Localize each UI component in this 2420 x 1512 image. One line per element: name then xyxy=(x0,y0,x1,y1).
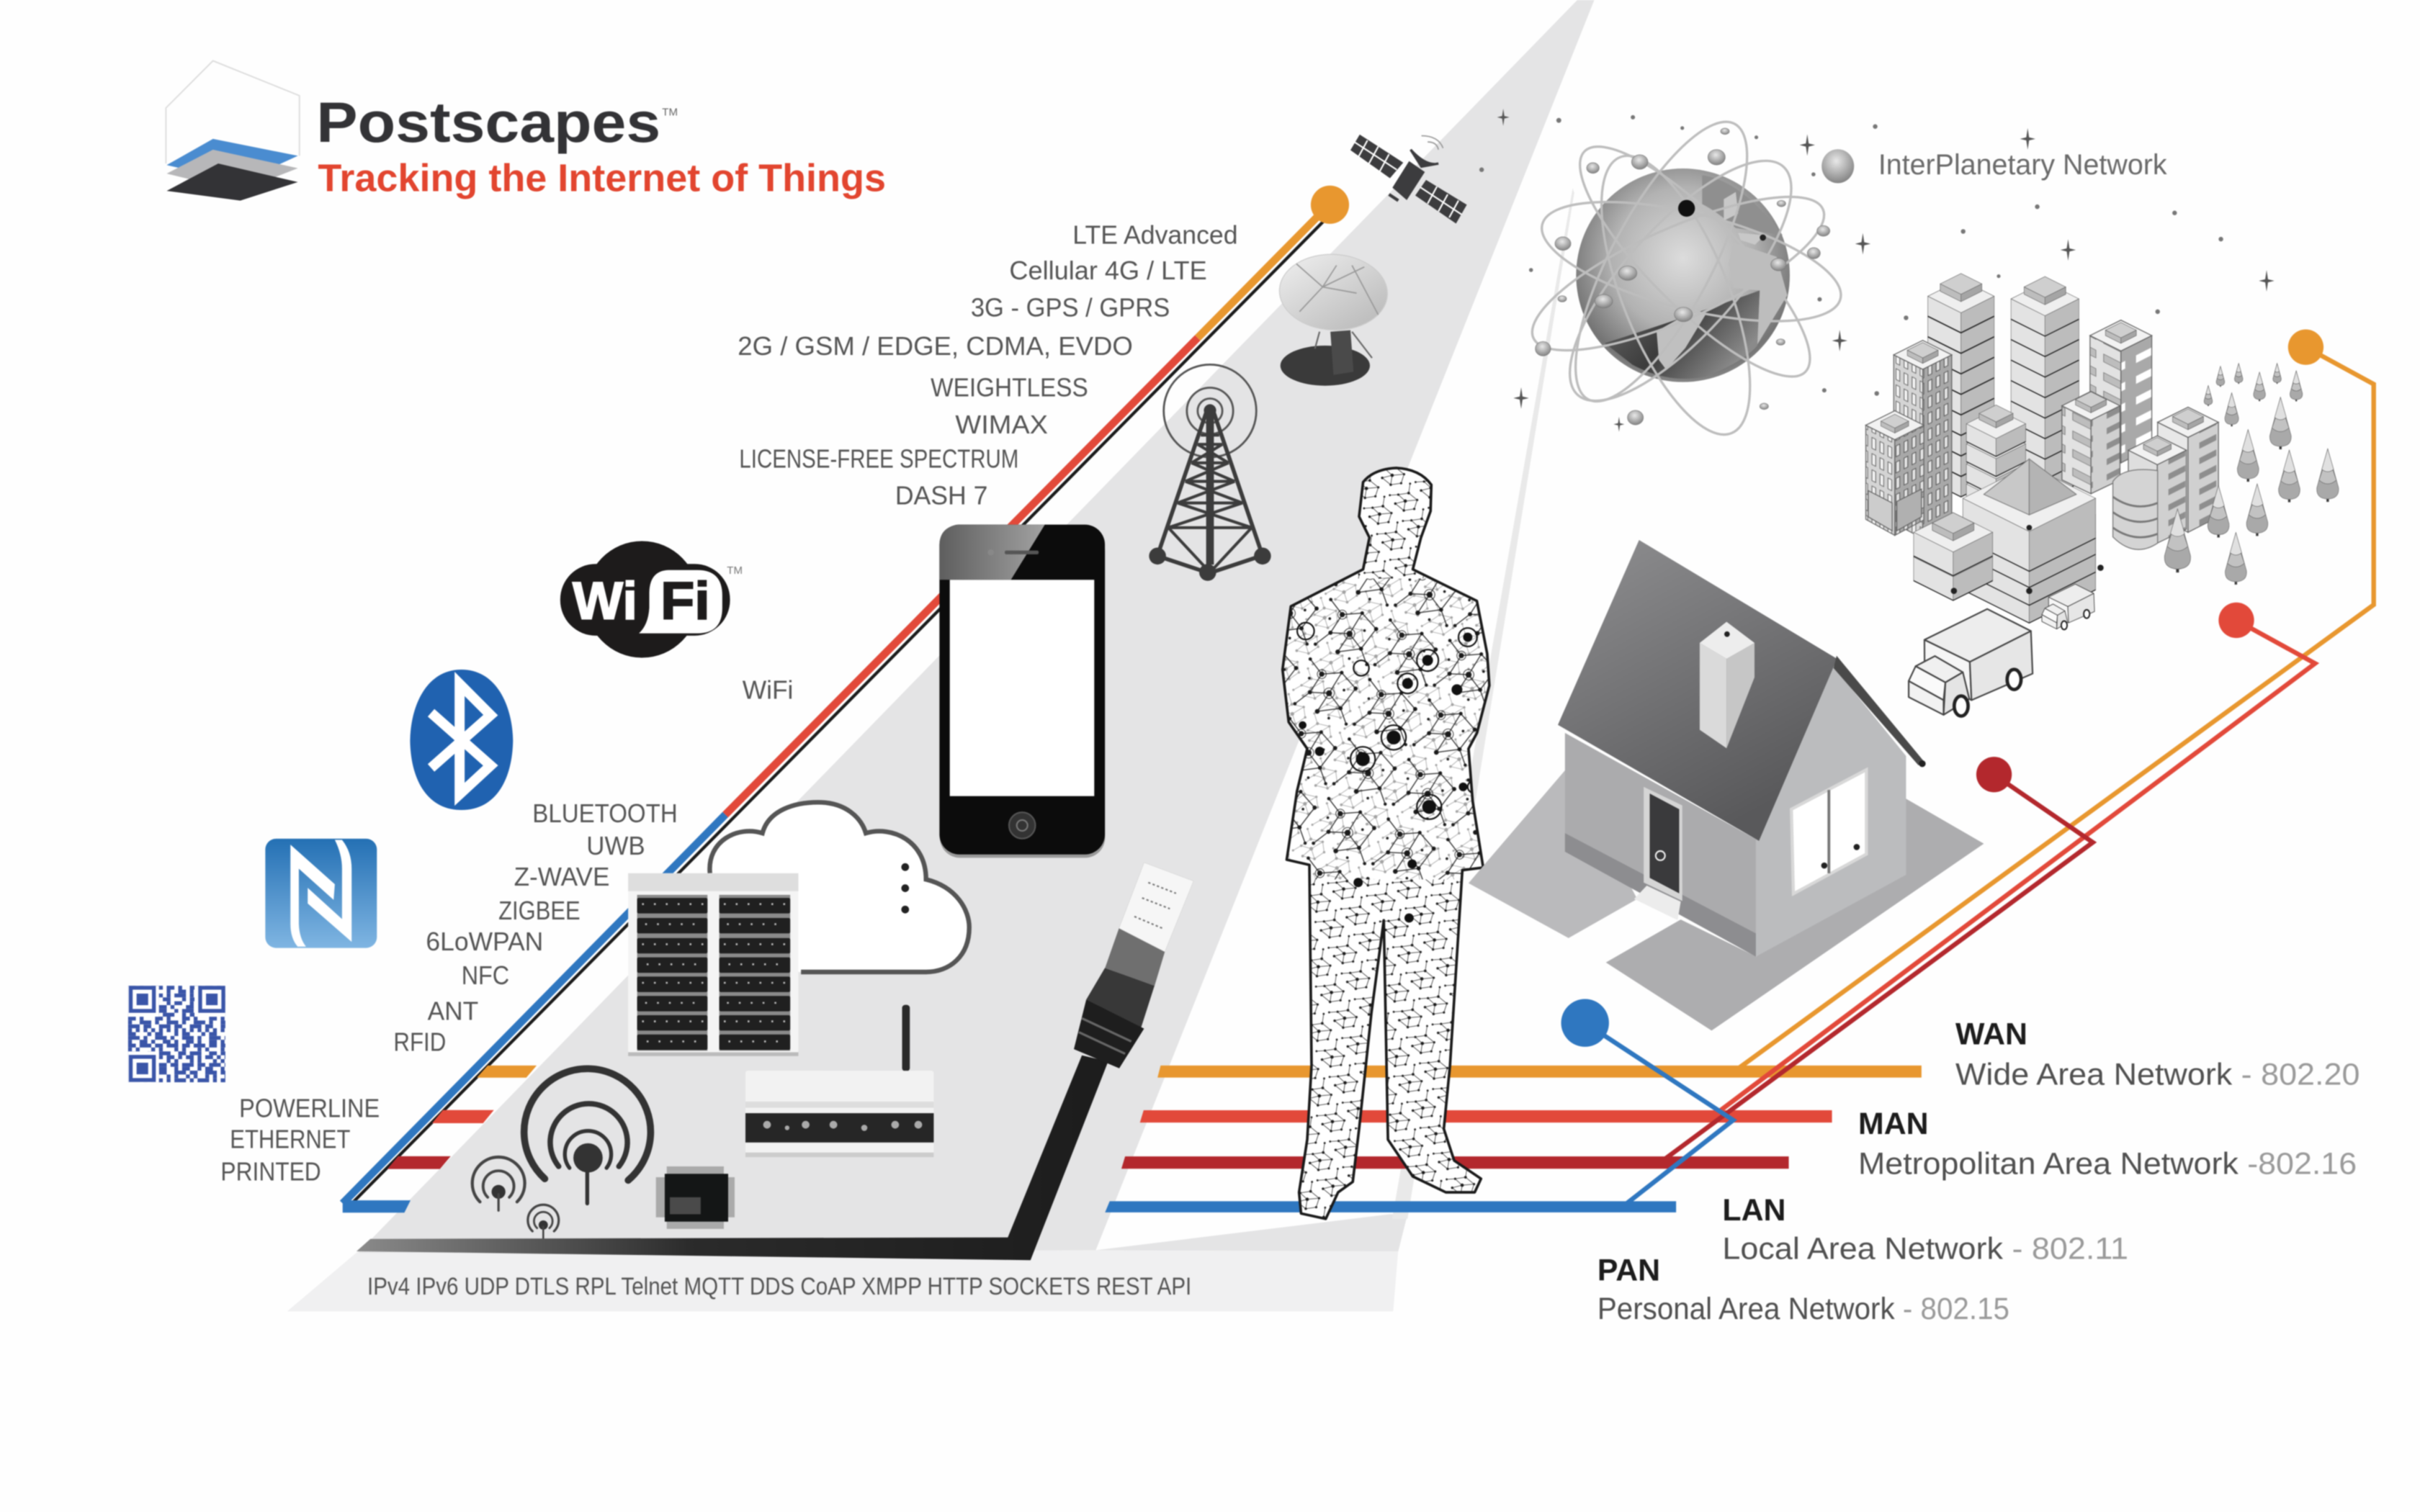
WAN label xyxy=(1955,1017,2360,1092)
icon: wifi logo: Wi xyxy=(573,572,637,630)
panel: diagonal technology rail xyxy=(343,186,1349,1208)
PAN label xyxy=(1597,1254,2009,1326)
pyramid building xyxy=(1963,459,2104,623)
icon: wifi logo xyxy=(560,541,743,658)
short range labels: Z-WAVE xyxy=(514,862,609,891)
wired labels xyxy=(220,1093,380,1186)
short range labels: BLUETOOTH xyxy=(532,798,678,828)
icon: small signal xyxy=(472,1157,525,1210)
stars xyxy=(1479,109,2275,432)
logo wordmark: Postscapes xyxy=(316,90,660,154)
MAN label: Metropolitan Area Network -802.16 xyxy=(1858,1147,2357,1182)
icon: small truck xyxy=(2042,584,2094,629)
panel: left rail stubs xyxy=(343,1066,537,1212)
building J xyxy=(2158,408,2218,532)
wired labels: PRINTED xyxy=(220,1156,321,1186)
interplanetary label: InterPlanetary Network xyxy=(1878,149,2167,181)
icon: cell tower xyxy=(1149,364,1271,581)
cellular labels: 3G - GPS / GPRS xyxy=(971,292,1170,322)
cellular labels: DASH 7 xyxy=(895,481,987,510)
icon: nfc xyxy=(265,839,377,948)
cellular labels: Cellular 4G / LTE xyxy=(1009,256,1207,285)
LAN label xyxy=(1722,1193,2128,1266)
icon: server rack xyxy=(628,873,798,1056)
tower A xyxy=(1928,274,1994,497)
panel: grey wedge under the man xyxy=(1095,1214,1407,1251)
PAN label: PAN xyxy=(1597,1254,1660,1288)
short range labels xyxy=(393,798,678,1056)
tower B xyxy=(2011,276,2079,500)
cellular labels: LTE Advanced xyxy=(1072,220,1238,250)
panel: dark red connector xyxy=(1665,757,2093,1158)
icon: qr code xyxy=(128,986,225,1082)
icon: microchip xyxy=(656,1166,735,1229)
MAN label xyxy=(1858,1107,2357,1182)
icon: tiny signal xyxy=(528,1205,559,1239)
short range labels: ANT xyxy=(428,996,478,1025)
panel: right network rails xyxy=(1105,1066,1922,1212)
cable: ethernet run xyxy=(357,1056,1108,1260)
WAN label: WAN xyxy=(1955,1017,2027,1052)
icon: router xyxy=(745,1005,933,1157)
cellular labels: 2G / GSM / EDGE, CDMA, EVDO xyxy=(738,331,1133,361)
icon: large truck xyxy=(1909,609,2033,716)
icon: cloud xyxy=(709,802,969,972)
panel: grey perspective beam xyxy=(358,0,1595,1253)
tagline: Tracking the Internet of Things xyxy=(318,158,886,200)
panel: red MAN connector xyxy=(1711,603,2315,1117)
wifi label: WiFi xyxy=(743,675,793,705)
building C xyxy=(1894,341,1952,539)
logo icon xyxy=(166,60,300,201)
LAN label: Local Area Network - 802.11 xyxy=(1722,1232,2128,1266)
panel: thin light beam xyxy=(1392,188,1574,1219)
city buildings xyxy=(1865,274,2339,623)
low building xyxy=(1914,513,1993,600)
cellular labels: LICENSE-FREE SPECTRUM xyxy=(739,444,1018,473)
man: networked human figure xyxy=(1273,463,1497,1227)
short range labels: RFID xyxy=(393,1027,446,1056)
planet xyxy=(1821,149,1854,183)
protocols label: IPv4 IPv6 UDP DTLS RPL Telnet MQTT DDS CoAP XMPP HTTP SOCKETS REST API xyxy=(367,1273,1191,1300)
icon: wifi logo: TM xyxy=(727,564,743,577)
icon: large signal xyxy=(524,1068,650,1203)
cylinder building xyxy=(2113,469,2158,549)
panel: blue connector xyxy=(1561,999,1733,1203)
icon: smartphone xyxy=(939,525,1105,858)
short range labels: NFC xyxy=(462,960,509,990)
cellular labels: WEIGHTLESS xyxy=(931,373,1088,402)
PAN label: Personal Area Network - 802.15 xyxy=(1597,1292,2009,1326)
panel: pale floor strip xyxy=(287,1250,1398,1311)
MAN label: MAN xyxy=(1858,1107,1929,1141)
building E xyxy=(2090,320,2152,463)
WAN label: Wide Area Network - 802.20 xyxy=(1955,1057,2360,1092)
trees xyxy=(2164,364,2339,585)
building K xyxy=(2128,436,2187,543)
logo wordmark: TM xyxy=(662,107,678,119)
globe with orbits xyxy=(1515,100,1852,453)
panel: orange WAN connector xyxy=(1739,330,2374,1068)
icon: satellite xyxy=(1350,135,1467,223)
building G xyxy=(1966,405,2025,516)
short range labels: UWB xyxy=(586,831,645,860)
wired labels: ETHERNET xyxy=(230,1124,350,1153)
building D xyxy=(1865,410,1924,536)
short range labels: ZIGBEE xyxy=(498,896,581,925)
LAN label: LAN xyxy=(1722,1193,1785,1228)
icon: bluetooth xyxy=(410,670,513,810)
building F xyxy=(2062,391,2120,494)
wired labels: POWERLINE xyxy=(239,1093,380,1122)
house xyxy=(1469,540,1984,1030)
icon: satellite dish xyxy=(1278,252,1389,386)
short range labels: 6LoWPAN xyxy=(426,927,543,956)
cellular labels xyxy=(738,220,1238,510)
cellular labels: WIMAX xyxy=(955,410,1048,439)
icon: wifi logo: Fi xyxy=(660,572,710,630)
icon: ethernet plug xyxy=(1074,863,1193,1068)
